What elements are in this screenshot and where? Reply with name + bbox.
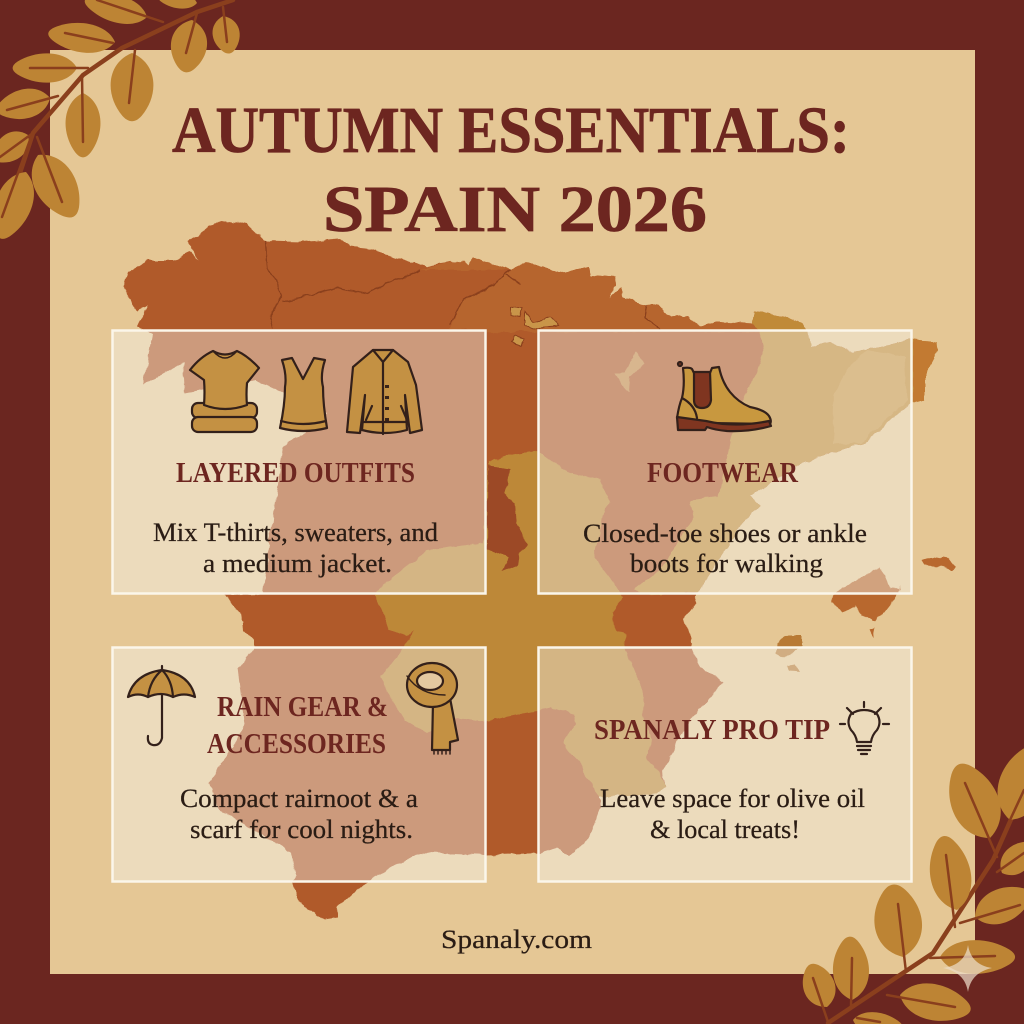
icon: light bulb: [840, 702, 889, 754]
title line 1: AUTUMN ESSENTIALS:: [172, 94, 850, 167]
island: Formentera: [787, 664, 800, 672]
region: north-east ochre: [634, 311, 938, 595]
map of Spain: [123, 220, 956, 920]
body text line 1: Compact rairnoot & a: [180, 784, 418, 813]
icon: sleeveless top: [280, 358, 327, 431]
heading: FOOTWEAR: [647, 458, 799, 489]
region: north band: [420, 258, 760, 332]
body text line 2: scarf for cool nights.: [190, 815, 413, 844]
region: eastern orange edge: [913, 340, 938, 403]
panel background: [112, 330, 486, 594]
body text line 1: Leave space for olive oil: [600, 784, 865, 813]
top-left autumn branch: [0, 0, 243, 245]
branch stem: [828, 790, 1024, 1023]
region: Madrid patch: [487, 465, 528, 572]
icon: jacket: [347, 350, 422, 434]
region: peninsula base: [123, 220, 938, 920]
title: [172, 94, 850, 246]
panel: footwear: [538, 330, 912, 594]
heading line 1: RAIN GEAR &: [217, 692, 388, 723]
icon: scarf: [407, 663, 458, 754]
icon: ankle boot: [677, 362, 771, 431]
body text line 1: Closed-toe shoes or ankle: [583, 519, 867, 548]
panel: Spanaly pro tip: [538, 648, 912, 882]
leaves: [796, 740, 1024, 1024]
branch stem: [2, 0, 233, 217]
body text line 1: Mix T-thirts, sweaters, and: [153, 518, 438, 547]
panel background: [538, 648, 912, 882]
leaf midribs: [0, 0, 227, 217]
title line 2: SPAIN 2026: [323, 173, 707, 246]
icon: umbrella: [128, 666, 195, 745]
region: dark province borders: [265, 241, 660, 329]
body text line 2: boots for walking: [630, 549, 823, 578]
region: small ochre patches: [510, 306, 558, 345]
island: Ibiza: [775, 635, 802, 657]
panel: layered outfits: [112, 330, 486, 594]
panel: rain gear and accessories: [112, 648, 486, 882]
panel background: [112, 648, 486, 882]
heading: SPANALY PRO TIP: [594, 715, 830, 746]
body text line 2: & local treats!: [650, 815, 800, 844]
heading: LAYERED OUTFITS: [176, 458, 415, 489]
body text line 2: a medium jacket.: [203, 549, 392, 578]
region: dotted Catalonia patch: [832, 350, 907, 445]
leaves: [0, 0, 243, 245]
leaf midribs: [813, 783, 1024, 1022]
island: Cabrera: [869, 628, 875, 637]
region: central ochre: [376, 450, 667, 797]
island: Mallorca: [830, 568, 901, 623]
island: Menorca: [923, 556, 956, 572]
region: pale province patch: [615, 352, 645, 393]
sparkle mark: [943, 945, 992, 992]
panel background: [538, 330, 912, 594]
icon: folded t-shirt: [190, 351, 259, 432]
bottom-right autumn branch: [796, 740, 1024, 1024]
heading line 2: ACCESSORIES: [207, 729, 386, 760]
footer website: Spanaly.com: [441, 925, 592, 954]
